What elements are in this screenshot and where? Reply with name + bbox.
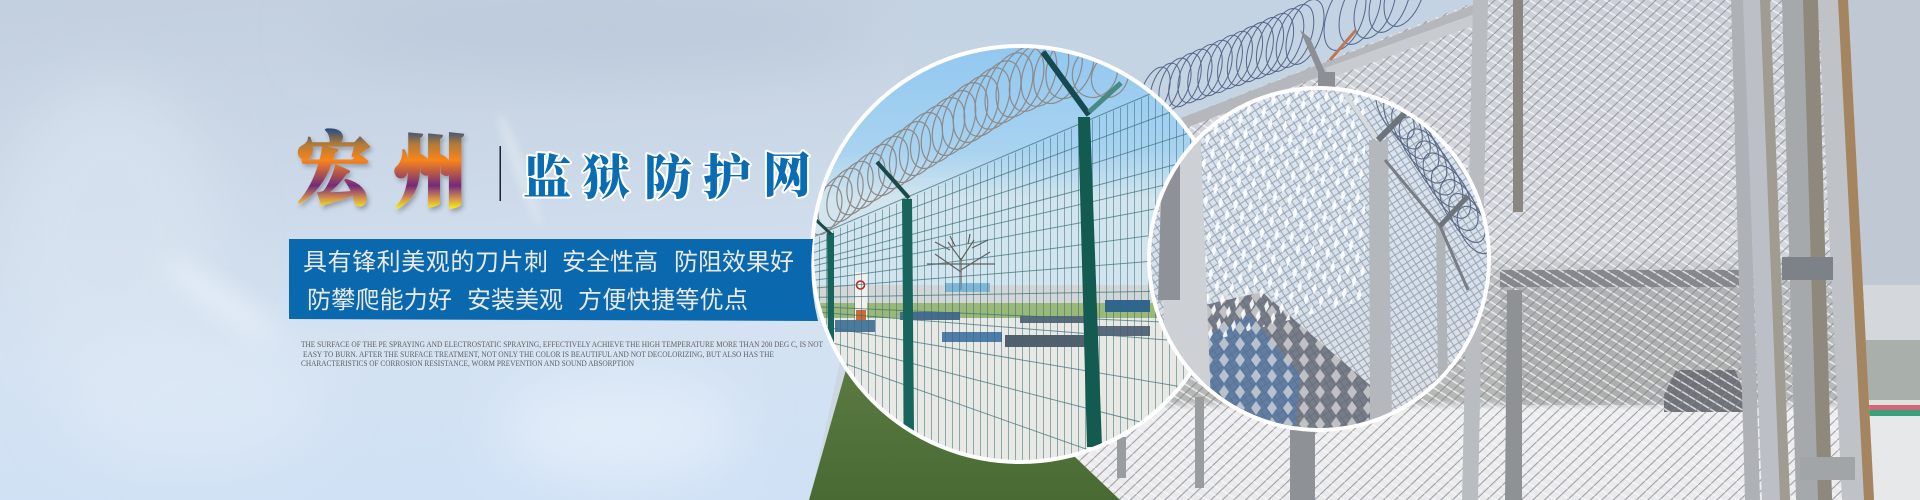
title: 监狱防护网: 防 bbox=[644, 139, 692, 208]
right photo: far-right landscape bbox=[1840, 0, 1920, 500]
title: 宏州: 州 bbox=[394, 108, 468, 223]
car bbox=[1664, 370, 1745, 412]
blue feature band bbox=[289, 239, 818, 321]
circle photo 1: welded mesh fence bbox=[810, 44, 1196, 464]
band text: 方便快捷等优点 bbox=[578, 287, 748, 314]
circle photo 2: expanded mesh close-up bbox=[1140, 79, 1500, 440]
dark lower-left area bbox=[1205, 292, 1370, 430]
title: 监狱防护网: 狱 bbox=[582, 139, 633, 208]
title: 监狱防护网 bbox=[523, 137, 811, 208]
white ring 1 bbox=[810, 44, 1230, 464]
steel frame and posts bbox=[1117, 0, 1874, 500]
band text bbox=[303, 249, 794, 314]
posts bbox=[827, 233, 834, 343]
band text: 安全性高 bbox=[562, 249, 658, 276]
band text: 具有锋利美观的刀片刺 bbox=[303, 249, 548, 276]
fence wires bbox=[819, 96, 1191, 460]
english description: CHARACTERISTICS OF CORROSION RESISTANCE, WORM PREVENTION AND SOUND ABSORPTION bbox=[301, 358, 634, 368]
right photo: mesh fence panel bbox=[1050, 0, 1880, 500]
mesh bbox=[1151, 90, 1487, 428]
trailers bbox=[835, 320, 875, 332]
sign bbox=[855, 272, 867, 322]
posts bbox=[1160, 140, 1210, 388]
razor wire coil bbox=[814, 48, 1128, 236]
razor wire bbox=[1376, 100, 1487, 254]
light left sky panel bbox=[0, 17, 840, 500]
title: 监狱防护网: 网 bbox=[763, 137, 811, 206]
title: 监狱防护网: 护 bbox=[703, 139, 751, 208]
band text: 防攀爬能力好 bbox=[307, 287, 452, 314]
razor wire behind circles bbox=[1134, 0, 1434, 121]
grass bbox=[809, 370, 1120, 500]
title: 宏州 bbox=[297, 106, 468, 223]
white ring 2 bbox=[1147, 86, 1491, 432]
title: 监狱防护网: 监 bbox=[523, 139, 571, 208]
tree bbox=[927, 234, 995, 290]
title: 宏州: 宏 bbox=[297, 106, 376, 221]
band text: 安装美观 bbox=[467, 287, 563, 314]
band text: 防阻效果好 bbox=[674, 249, 794, 276]
english description bbox=[301, 339, 824, 368]
separator bbox=[500, 146, 501, 201]
english description: THE SURFACE OF THE PE SPRAYING AND ELECTROSTATIC SPRAYING, EFFECTIVELY ACHIEVE THE HIGH TEMPERATURE MORE THAN 200 DEG C, IS NOT bbox=[301, 339, 824, 349]
english description: EASY TO BURN. AFTER THE SURFACE TREATMENT, NOT ONLY THE COLOR IS BEAUTIFUL AND NOT DECOLORIZING, BUT ALSO HAS THE bbox=[303, 349, 774, 359]
